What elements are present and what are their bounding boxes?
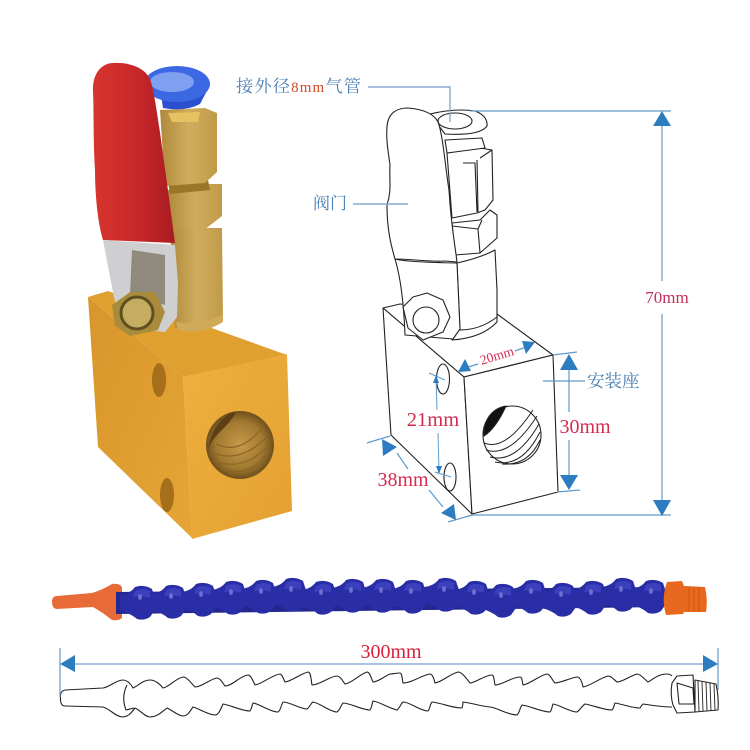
- dimension: 21mm hole spacing: [407, 373, 459, 477]
- line art: lower hex nut: [452, 210, 497, 255]
- photo: block front face: [183, 354, 292, 539]
- drawing: valve line art: [383, 108, 558, 514]
- leader line: valve: [353, 203, 408, 205]
- photo: hex bolt: [112, 292, 165, 336]
- dimension: 30mm height: [553, 352, 611, 492]
- line art: hose body: [60, 672, 672, 717]
- dimension: 20mm width: 20mm: [478, 343, 516, 368]
- photo: block top face: [88, 291, 287, 377]
- dimension: 70mm height: [470, 111, 689, 516]
- label: air tube diameter: 接外径8mm气管: [236, 77, 361, 96]
- line art: nozzle collar: [124, 685, 134, 710]
- photo: lower hex nut: [168, 184, 222, 230]
- photo: small mounting holes: [152, 363, 174, 512]
- line art: top fitting: [430, 110, 487, 153]
- photo: plate shadow: [130, 250, 165, 305]
- line art: threaded bore: [483, 406, 541, 464]
- line art: end fitting: [671, 675, 718, 713]
- dimension: 38mm depth: 38mm: [377, 469, 429, 491]
- line art: valve body: [457, 250, 497, 330]
- photo: brass collar: [176, 314, 223, 332]
- label: valve: 阀门: [313, 194, 347, 213]
- label: mounting seat: 安装座: [587, 371, 640, 391]
- line art: upper hex nut: [447, 148, 493, 218]
- photo: orange nozzle tip: [52, 584, 122, 620]
- photo: red handle: [93, 63, 175, 243]
- photo: blue push fitting: [144, 66, 210, 109]
- dimension: 38mm depth: [367, 436, 472, 522]
- line art: handle: [387, 108, 457, 262]
- leader line: air tube: [368, 87, 450, 122]
- photo: orange threaded fitting: [664, 581, 707, 615]
- photo: threaded bore: [206, 411, 274, 479]
- dimension: 30mm height: 30mm: [559, 416, 611, 438]
- dimension: 20mm width: [458, 341, 535, 372]
- photo: ball valve on mounting block: [88, 63, 292, 539]
- dimension: 70mm height: 70mm: [645, 288, 689, 307]
- line art: hex bolt: [403, 293, 450, 340]
- photo: valve body: [170, 228, 223, 329]
- photo: nut highlight: [168, 112, 200, 122]
- dimension: 300mm length: [60, 641, 718, 697]
- leader line: mounting seat: [543, 380, 585, 382]
- line art: small holes: [436, 364, 456, 491]
- dimension: 300mm length: 300mm: [360, 641, 422, 663]
- dimension: 21mm hole spacing: 21mm: [407, 409, 459, 431]
- photo: block left face: [88, 297, 192, 538]
- line art: collar: [452, 314, 497, 340]
- photo: flexible coolant hose: [52, 578, 707, 620]
- line art: mounting block: [383, 304, 558, 514]
- photo: upper hex nut: [160, 108, 217, 186]
- drawing: hose outline: [60, 672, 718, 717]
- line art: lever plate: [395, 259, 460, 339]
- photo: blue hose segments: [120, 578, 666, 620]
- photo: blue hose core: [116, 587, 662, 614]
- photo: ring between nuts: [168, 180, 210, 194]
- photo: silver lever plate: [103, 240, 178, 332]
